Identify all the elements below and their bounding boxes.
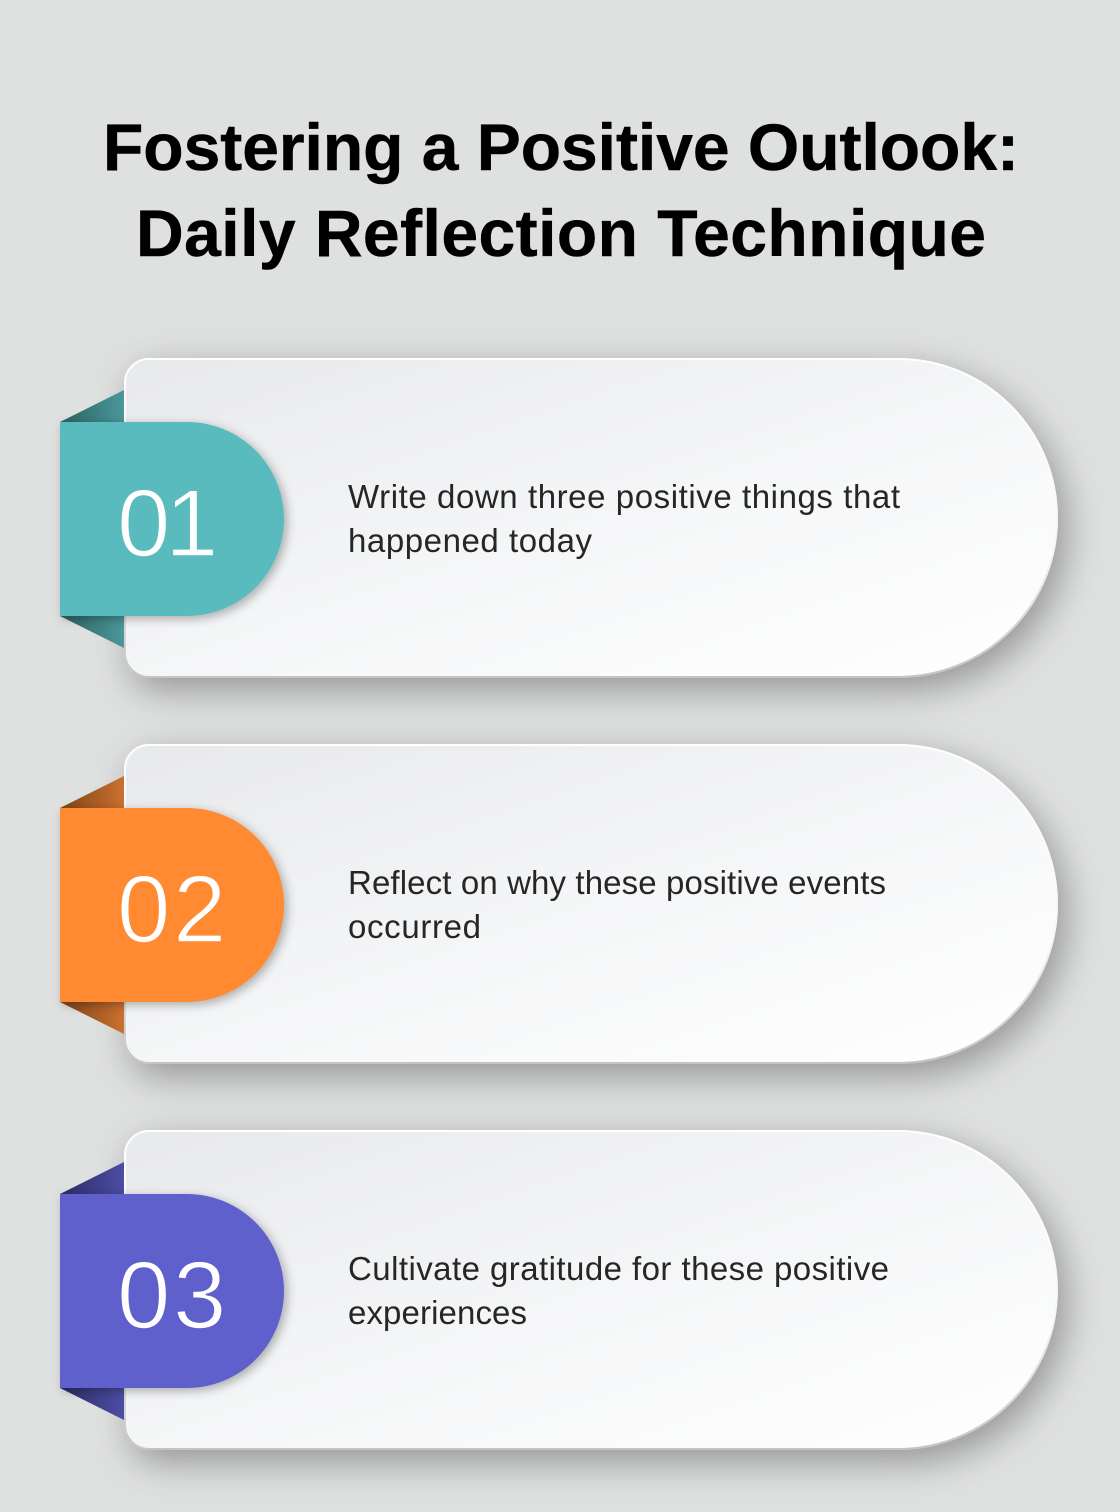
text: step 01: Write down three positive things that xyxy=(348,478,900,515)
number badge: step 02 xyxy=(60,808,284,1002)
number: 03: 03 xyxy=(117,1242,226,1349)
card: step 03 xyxy=(125,1131,1057,1449)
ribbon fold top: step 02 xyxy=(60,776,124,808)
ribbon fold bottom: step 01 xyxy=(60,616,124,648)
panel: step 03 xyxy=(60,1131,1057,1449)
text: step 03: Cultivate gratitude for these positive xyxy=(348,1250,889,1287)
title: Daily Reflection Technique xyxy=(136,196,986,270)
panel: step 01 xyxy=(60,359,1057,677)
text: step 01 xyxy=(348,478,900,559)
text: step 02: occurred xyxy=(348,908,481,945)
card: step 02 xyxy=(125,745,1057,1063)
number badge: step 01 xyxy=(60,422,284,616)
text: step 01: happened today xyxy=(348,522,592,559)
number badge: step 03 xyxy=(60,1194,284,1388)
number: 01: 01 xyxy=(117,470,218,577)
ribbon fold top: step 03 xyxy=(60,1162,124,1194)
card: step 01 xyxy=(125,359,1057,677)
title xyxy=(103,110,1019,270)
ribbon fold bottom: step 03 xyxy=(60,1388,124,1420)
text: step 02 xyxy=(348,864,886,945)
panel: step 02 xyxy=(60,745,1057,1063)
number: 02: 02 xyxy=(117,856,226,963)
ribbon fold top: step 01 xyxy=(60,390,124,422)
ribbon fold bottom: step 02 xyxy=(60,1002,124,1034)
text: step 03 xyxy=(348,1250,889,1331)
text: step 03: experiences xyxy=(348,1294,527,1331)
text: step 02: Reflect on why these positive events xyxy=(348,864,886,901)
title: Fostering a Positive Outlook: xyxy=(103,110,1019,184)
